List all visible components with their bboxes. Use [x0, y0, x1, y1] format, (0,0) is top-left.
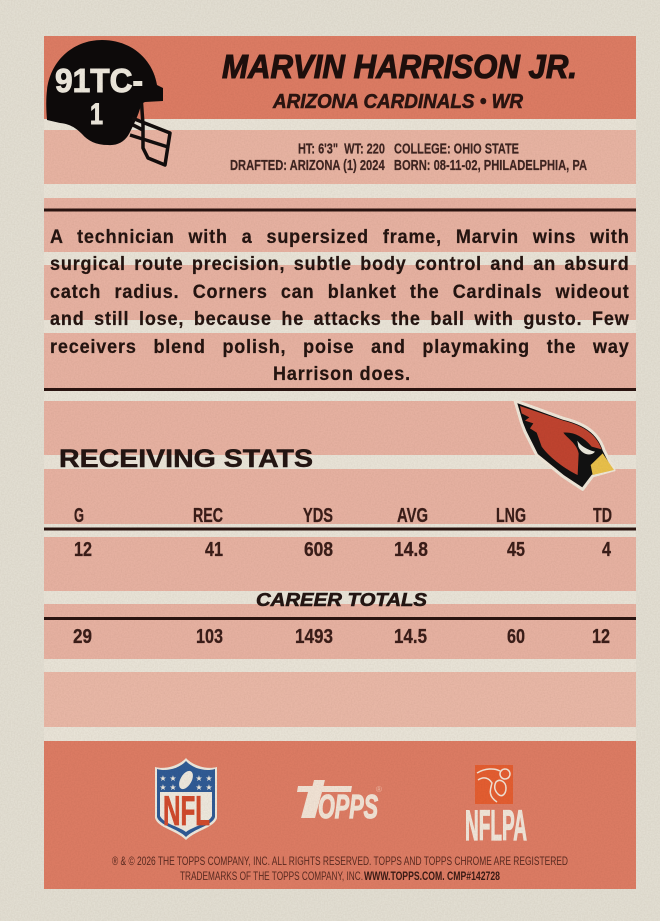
table: season stats row: 608: [304, 539, 333, 561]
text block: player bio: Harrison does.: [273, 364, 411, 385]
heading: team and position: ARIZONA CARDINALS • WR: [272, 91, 524, 113]
table: career totals row: 29: [73, 626, 92, 648]
table: career totals row: 14.5: [394, 626, 427, 648]
table: column headers: G: [74, 505, 84, 527]
heading: career totals: CAREER TOTALS: [256, 590, 427, 610]
table: career totals row: 12: [592, 626, 610, 648]
icon: NFL shield: ★: [195, 783, 203, 792]
panel: bio bands: [44, 198, 636, 388]
icon: helmet with card number: [46, 40, 170, 165]
table: season stats row: 41: [205, 539, 223, 561]
text block: player bio: receivers blend polish, poise and playmaking the way: [50, 337, 630, 358]
panel: footer: [44, 741, 636, 889]
icon: Topps logo: ®: [376, 785, 382, 794]
icon: NFLPA logo: [465, 765, 527, 850]
icon: NFL shield: ★: [169, 783, 177, 792]
text block: player bio: [50, 227, 630, 385]
panel: empty band: [44, 672, 636, 727]
icon: NFL shield: ★: [159, 774, 167, 783]
table: season stats row: 45: [507, 539, 525, 561]
text block: player bio: and still lose, because he attacks the ball with gusto. Few: [50, 309, 630, 330]
table: career totals row: 60: [507, 626, 525, 648]
icon: NFL shield: ★: [169, 774, 177, 783]
text: copyright line two: TRADEMARKS OF THE TOPPS COMPANY, INC.: [180, 869, 363, 883]
icon: NFL shield: ★: [195, 774, 203, 783]
icon: NFL shield: NFL: [163, 787, 210, 834]
panel: player info band: [44, 130, 636, 184]
table: career totals row: 1493: [295, 626, 333, 648]
icon: NFL shield: ★: [205, 783, 213, 792]
icon: NFL shield: ★: [159, 783, 167, 792]
icon: cardinal logo: [515, 401, 614, 489]
table: career totals row: 103: [196, 626, 223, 648]
panel: stats bands: [44, 401, 636, 659]
title: player name: MARVIN HARRISON JR.: [222, 48, 577, 85]
table: column headers: AVG: [397, 505, 428, 527]
text block: player bio: catch radius. Corners can blanket the Cardinals wideout: [50, 282, 630, 302]
table: season stats row: [74, 539, 612, 561]
table: column headers: TD: [593, 505, 612, 527]
table: season stats row: 12: [74, 539, 92, 561]
icon: helmet with card number: 1: [90, 98, 103, 131]
icon: Topps logo: OPPS: [318, 788, 378, 825]
text: height weight college: HT: 6'3" WT: 220 COLLEGE: OHIO STATE: [298, 142, 519, 158]
table: column headers: LNG: [496, 505, 526, 527]
icon: NFL shield: [155, 758, 217, 840]
table: season stats row: 14.8: [394, 539, 428, 561]
panel: name banner: [44, 36, 636, 119]
table: column headers: [74, 505, 612, 527]
table: column headers: REC: [193, 505, 223, 527]
icon: NFL shield: ★: [205, 774, 213, 783]
text: copyright line two: WWW.TOPPS.COM. CMP#142728: [364, 869, 500, 883]
text block: player bio: A technician with a supersized frame, Marvin wins with: [50, 227, 630, 248]
icon: helmet with card number: 91TC-: [55, 62, 143, 99]
icon: Topps logo: [297, 780, 382, 825]
heading: receiving stats: RECEIVING STATS: [59, 445, 313, 473]
table: season stats row: 4: [602, 539, 612, 561]
table: career totals row: [73, 626, 610, 648]
text block: player bio: surgical route precision, subtle body control and an absurd: [50, 254, 630, 275]
table: column headers: YDS: [303, 505, 333, 527]
text: NFLPA: [465, 802, 527, 850]
